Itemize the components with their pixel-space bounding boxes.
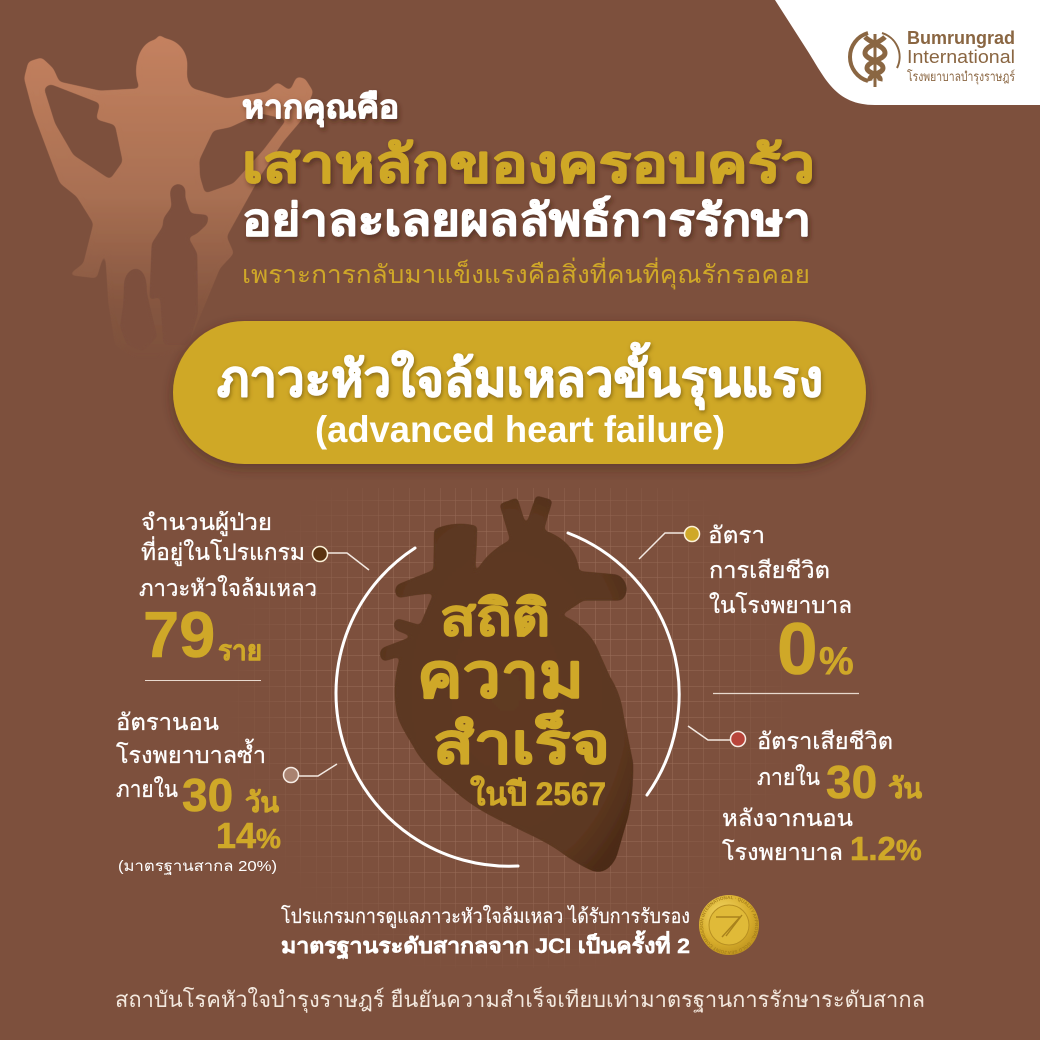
background grid pattern [257,488,763,953]
stat: in-hospital mortality [708,522,854,690]
headline line 2: เสาหลักของครอบครัว [242,136,815,194]
stat: readmission rate [116,709,281,875]
leader: 30-day mortality [688,726,746,746]
stat: readmission rate: วัน [245,787,279,818]
heart title [417,590,610,812]
headline line 1: หากคุณคือ [242,89,399,128]
banner title thai: ภาวะหัวใจล้มเหลวขั้นรุนแรง [217,342,823,410]
stat: 30-day mortality: อัตราเสียชีวิต [757,728,893,754]
logo emblem: caduceus ring [850,33,900,87]
stat: in-hospital mortality: อัตรา [708,522,765,548]
JCI accreditation text: โปรแกรมการดูแลภาวะหัวใจล้มเหลว ได้รับการรับรอง [281,905,690,929]
logo wordmark: Bumrungrad [907,28,1015,48]
stat: 30-day mortality: 1.2% [850,830,922,867]
footer statement: สถาบันโรคหัวใจบำรุงราษฎร์ ยืนยันความสำเร็จเทียบเท่ามาตรฐานการรักษาระดับสากล [115,985,925,1013]
stat: patients in program [139,509,317,671]
silhouette: small child [120,269,157,352]
banner pill [173,321,866,464]
stat: patients in program: ราย [218,635,262,666]
divider right [713,692,859,694]
hospital logo [850,28,1015,87]
stat: in-hospital mortality: ในโรงพยาบาล [709,592,852,618]
logo wordmark: โรงพยาบาลบำรุงราษฎร์ [907,69,1015,85]
circle arcs around heart [336,533,679,866]
stat: readmission rate: (มาตรฐานสากล 20%) [118,858,277,875]
banner title english: (advanced heart failure) [315,409,725,450]
divider left [145,680,261,682]
heart title: สถิติ [440,590,550,646]
stat: patients in program: ที่อยู่ในโปรแกรม [141,536,305,566]
stat: readmission rate: 30 [182,769,233,821]
stat: in-hospital mortality: 0 [777,609,818,690]
stat: readmission rate: 14% [216,815,281,856]
stat: 30-day mortality: ภายใน [757,764,820,790]
stat: 30-day mortality: วัน [888,773,922,804]
heart title: สำเร็จ [433,709,610,775]
stat: readmission rate: อัตรานอน [116,709,219,735]
stat: in-hospital mortality: % [819,640,854,683]
stat: patients in program: 79 [143,598,215,671]
silhouette: small father and child [149,184,209,345]
icon: JCI gold seal [699,895,759,955]
headline line 3: อย่าละเลยผลลัพธ์การรักษา [242,195,811,245]
icon: JCI gold seal: JOINT COMMISSION INTERNATIONAL · QUALITY APPROVAL · GOLD SEAL [700,896,758,954]
subheading: เพราะการกลับมาแข็งแรงคือสิ่งที่คนที่คุณรักรอคอย [242,257,810,290]
heart title: ในปี 2567 [470,775,606,812]
leader: readmission [284,764,337,782]
heart title: ความ [417,642,584,711]
JCI accreditation text [281,905,690,960]
leader: in-hospital mortality [639,526,700,559]
stat: patients in program: ภาวะหัวใจล้มเหลว [139,575,317,601]
stat: 30-day mortality: โรงพยาบาล [722,839,843,865]
JCI accreditation text: มาตรฐานระดับสากลจาก JCI เป็นครั้งที่ 2 [281,930,690,960]
leader: patients count [312,546,369,570]
pill shape [173,321,866,464]
heart illustration [380,495,633,872]
headline [242,89,815,290]
logo corner panel [775,0,1040,105]
stat: in-hospital mortality: การเสียชีวิต [709,557,830,583]
heart shape [380,495,633,872]
logo wordmark [907,28,1015,85]
silhouette: parent carrying child [24,34,313,358]
stat: 30-day mortality: หลังจากนอน [722,805,853,831]
stat: 30-day mortality: 30 [826,756,877,808]
stat: 30-day mortality [722,728,922,867]
family silhouette [24,34,313,358]
logo wordmark: International [907,47,1015,67]
stat: patients in program: จำนวนผู้ป่วย [141,509,272,536]
stat: readmission rate: ภายใน [116,776,178,802]
stat: readmission rate: โรงพยาบาลซ้ำ [116,739,266,768]
